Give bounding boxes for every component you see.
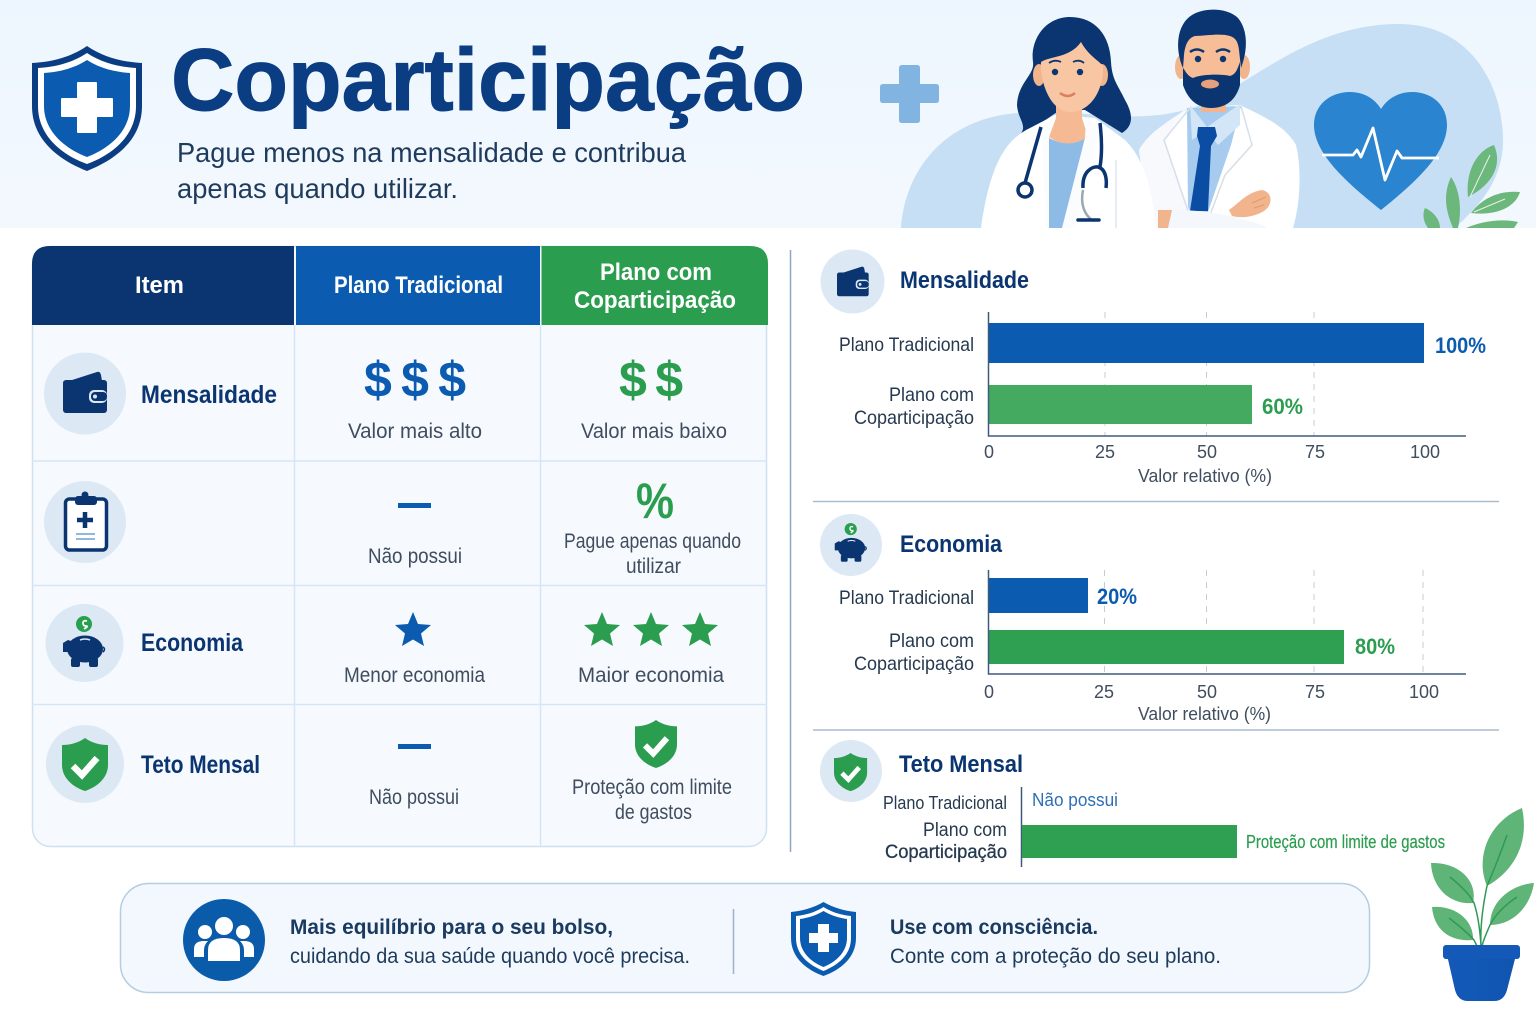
row: Utilização (44, 473, 741, 578)
icon: shield small (820, 740, 882, 802)
icon: light blue plus (880, 65, 939, 123)
title: Coparticipação (171, 30, 805, 129)
row: Teto Mensal (46, 720, 732, 824)
icon: clipboard (44, 481, 126, 563)
bar chart: Plano com (889, 630, 974, 652)
bar chart: 20% (1097, 584, 1137, 609)
bar chart: 60% (1262, 394, 1303, 419)
bar chart: 75 (1305, 442, 1325, 462)
row: Economia: Maior economia (578, 664, 724, 687)
panel: bottom callout (120, 884, 1370, 992)
bar chart: 25 (1094, 682, 1114, 702)
bar chart: Plano Tradicional (839, 334, 974, 356)
panel: chart Economia (820, 514, 1466, 724)
panel: chart Economia: Economia (900, 531, 1003, 558)
background blob (901, 24, 1503, 228)
bar chart: 50 (1197, 682, 1217, 702)
row: Mensalidade: Valor mais baixo (581, 420, 727, 443)
icon: piggy small (820, 514, 882, 576)
row: Economia: Economia (141, 629, 244, 657)
subtitle: apenas quando utilizar. (177, 173, 458, 204)
icon: star (395, 612, 431, 646)
icon: people (183, 899, 265, 981)
header band (0, 0, 1536, 228)
female doctor (981, 17, 1156, 228)
row: Mensalidade: $$$ (364, 352, 466, 408)
bar chart: Coparticipação (885, 842, 1007, 863)
row: Economia: Menor economia (344, 664, 485, 687)
bar chart (839, 570, 1466, 724)
row: Teto Mensal: de gastos (615, 801, 692, 824)
icon: shield blue (791, 902, 856, 976)
row: Mensalidade: $$ (619, 352, 683, 408)
bar chart: Plano Tradicional (839, 587, 974, 609)
table header: Plano com Coparticipação: Coparticipação (574, 287, 736, 314)
row: Teto Mensal: Não possui (369, 786, 459, 809)
row: Mensalidade (44, 352, 727, 443)
row: Utilização: utilizar (626, 555, 681, 578)
bar chart: Plano com (923, 820, 1007, 841)
bar chart: 100 (1409, 682, 1439, 702)
icon: green shield (46, 725, 124, 803)
text: Use com consciência (890, 915, 1221, 968)
bar chart: Coparticipação (854, 653, 974, 675)
table header: Plano Tradicional (296, 246, 540, 325)
bar chart (883, 787, 1445, 867)
bar chart: 0 (984, 442, 994, 462)
row: Economia (46, 604, 724, 687)
table header: Plano com Coparticipação: Plano com (600, 259, 712, 286)
header leaves (1423, 145, 1520, 228)
bar chart: 75 (1305, 682, 1325, 702)
text: Use com consciência: Conte com a proteção do seu plano. (890, 944, 1221, 968)
icon: wallet (44, 352, 126, 434)
bar chart: 25 (1095, 442, 1115, 462)
icon: three stars (584, 612, 718, 646)
subtitle: Pague menos na mensalidade e contribua (177, 137, 686, 168)
row: Utilização: Não possui (368, 545, 462, 568)
text: Mais equilíbrio: Mais equilíbrio para o seu bolso, (290, 915, 613, 939)
bar chart: 100% (1435, 333, 1486, 358)
icon: potted plant (1431, 808, 1534, 1001)
bar chart (839, 312, 1486, 486)
row: Utilização: Pague apenas quando (564, 530, 741, 553)
row: Mensalidade: Mensalidade (141, 381, 277, 409)
bar chart: Não possui (1032, 789, 1118, 810)
subtitle (177, 137, 686, 204)
panel: chart Mensalidade (820, 250, 1486, 486)
bar chart: Valor relativo (%) (1138, 703, 1271, 724)
bar chart: Proteção com limite de gastos (1246, 831, 1445, 852)
panel: comparison table (32, 246, 768, 846)
icon: wallet small (820, 250, 884, 314)
icon: piggy bank (46, 604, 124, 682)
row: Utilização: % (636, 473, 674, 529)
bar chart: 100 (1410, 442, 1440, 462)
bar chart: Plano Tradicional (883, 793, 1007, 813)
text: Mais equilíbrio: cuidando da sua saúde quando você precisa. (290, 944, 690, 968)
row: Teto Mensal: Teto Mensal (141, 751, 260, 779)
bar chart: 0 (984, 682, 994, 702)
table header: Item: Item (135, 272, 184, 299)
icon: heart with pulse (1314, 92, 1447, 210)
bar chart: Coparticipação (854, 407, 974, 429)
panel: chart Teto Mensal: Teto Mensal (899, 751, 1023, 778)
table header: Item (32, 246, 294, 325)
icon: shield with cross (32, 46, 142, 171)
bar chart: Valor relativo (%) (1138, 465, 1272, 486)
table header: Plano Tradicional: Plano Tradicional (334, 272, 503, 299)
panel: chart Teto Mensal (820, 740, 1445, 867)
bar chart: Plano com (889, 384, 974, 406)
bar chart: 80% (1355, 634, 1395, 659)
male doctor (1139, 10, 1300, 228)
panel: chart Mensalidade: Mensalidade (900, 267, 1029, 294)
text: Mais equilíbrio (290, 915, 690, 968)
bar chart: 50 (1197, 442, 1217, 462)
table header: Plano com Coparticipação (542, 246, 768, 325)
text: Use com consciência: Use com consciência. (890, 915, 1098, 939)
row: Mensalidade: Valor mais alto (348, 420, 482, 443)
row: Teto Mensal: Proteção com limite (572, 776, 732, 799)
